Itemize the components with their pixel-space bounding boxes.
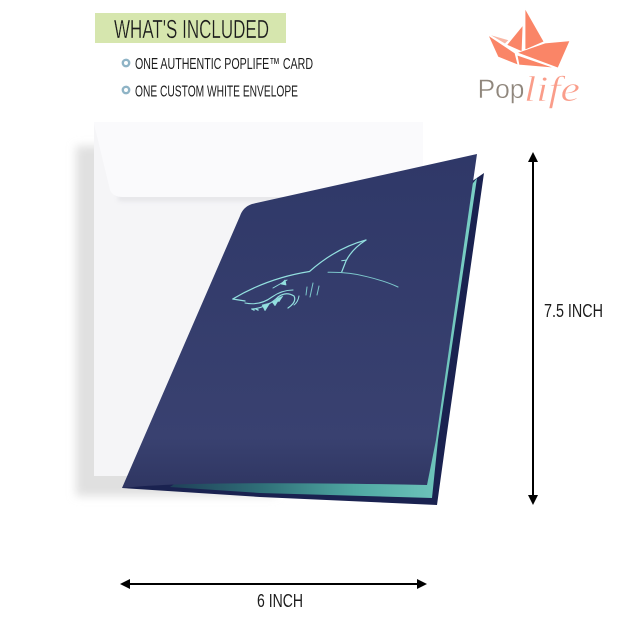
icon: shark cut-out — [233, 240, 398, 311]
list: contents — [123, 56, 313, 100]
list item: envelope: ONE CUSTOM WHITE ENVELOPE — [135, 84, 298, 100]
logo: Poplife — [478, 8, 580, 109]
icon: bullet — [123, 60, 129, 66]
envelope flap shadow — [118, 195, 423, 201]
wordmark: life: life — [524, 69, 580, 109]
panel: shark pop-up card — [122, 154, 484, 505]
panel: white envelope — [76, 122, 423, 496]
heading text: WHAT'S INCLUDED — [114, 14, 269, 44]
heading: what's included — [95, 13, 286, 44]
arrow: width dimension — [120, 579, 427, 589]
wordmark: Pop: Pop — [478, 74, 524, 104]
list item: card: ONE AUTHENTIC POPLIFE™ CARD — [135, 56, 313, 73]
card inner teal page — [170, 178, 477, 498]
card front cover — [122, 154, 477, 488]
envelope drop shadow — [76, 146, 276, 496]
card back cover — [122, 173, 484, 505]
icon: bullet — [123, 87, 129, 93]
envelope body — [94, 122, 423, 476]
envelope flap — [94, 122, 423, 197]
icon: origami boat — [488, 8, 570, 68]
arrow: height dimension — [528, 152, 538, 505]
label: 7.5 inch: 7.5 INCH — [544, 301, 603, 321]
heading background — [95, 13, 286, 43]
label: 6 inch: 6 INCH — [257, 591, 303, 611]
